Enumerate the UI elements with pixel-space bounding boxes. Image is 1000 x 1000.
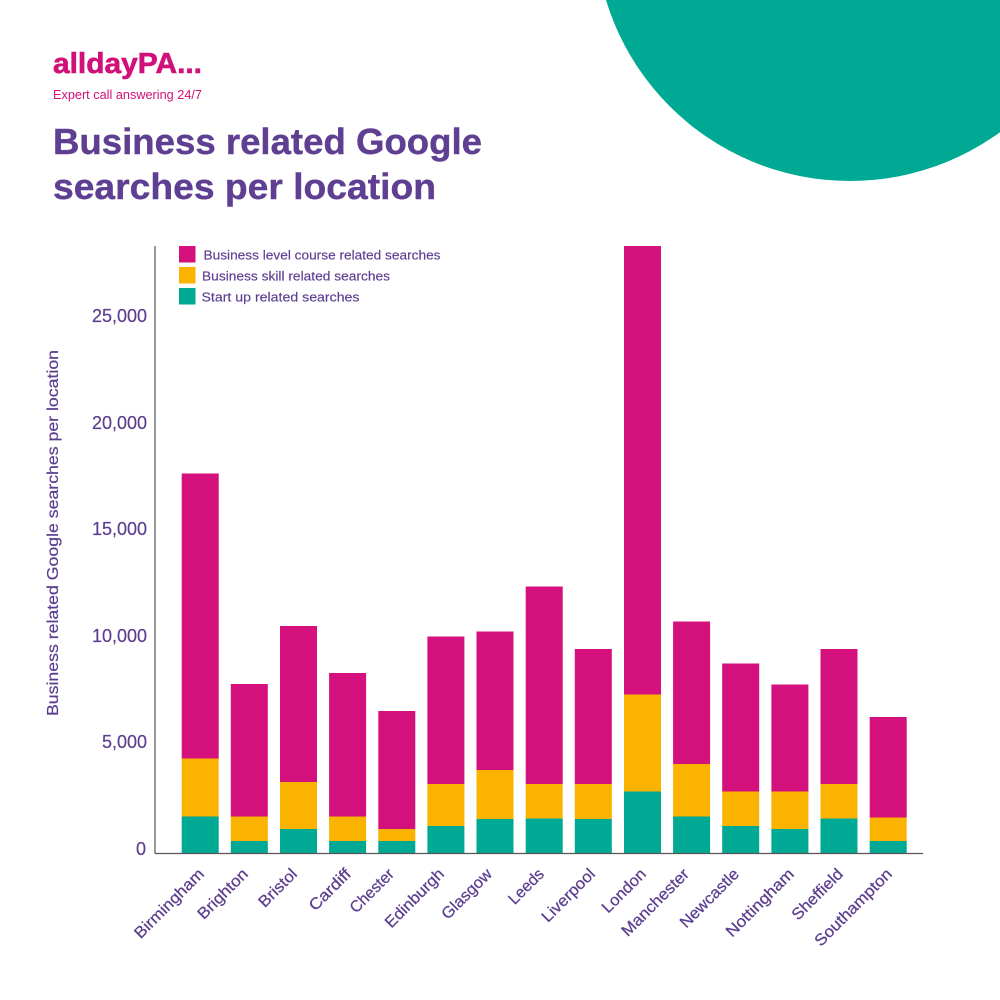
legend item: business skill: Business skill related searches (202, 268, 391, 284)
bar: Nottingham (771, 684, 808, 854)
title: searches per location (53, 166, 436, 207)
y axis tick labels: 15,000 (92, 519, 147, 539)
bar: London (624, 246, 661, 854)
legend (179, 246, 441, 304)
x axis city labels: Chester (347, 865, 398, 917)
x axis city labels: London (599, 866, 650, 917)
bar: Birmingham (182, 474, 219, 854)
legend item: business level course: Business level course related searches (204, 248, 441, 262)
y axis tick labels: 25,000 (92, 306, 147, 326)
x axis city labels: Manchester (619, 865, 693, 940)
y axis tick labels: 10,000 (92, 626, 147, 646)
y axis title: Business related Google searches per location (45, 350, 62, 716)
y axis tick labels: 20,000 (92, 413, 147, 433)
x axis city labels: Sheffield (789, 866, 847, 924)
bar: Cardiff (329, 673, 366, 854)
bar: Leeds (526, 586, 563, 854)
x axis city labels: Newcastle (677, 866, 743, 932)
logo: Expert call answering 24/7 (53, 87, 202, 102)
bar: Sheffield (820, 649, 858, 854)
logo (53, 48, 202, 102)
bar: Chester (378, 711, 415, 854)
bar: Brighton (231, 684, 268, 854)
x axis city labels: Glasgow (439, 865, 496, 923)
y axis tick labels: 0 (136, 839, 146, 859)
y axis tick labels: 5,000 (102, 732, 147, 752)
chart axes (155, 246, 923, 854)
title: Business related Google (53, 121, 482, 162)
x axis city labels: Bristol (256, 866, 301, 911)
logo: alldayPA... (53, 48, 202, 80)
decorative teal circle (595, 0, 1000, 181)
stacked bar chart (182, 246, 907, 854)
x axis city labels: Birmingham (131, 866, 208, 942)
bar: Newcastle (722, 664, 759, 854)
bar: Manchester (673, 622, 710, 854)
y axis tick labels (92, 306, 147, 859)
title (53, 121, 482, 207)
x axis city labels: Nottingham (723, 866, 798, 941)
bar: Bristol (280, 626, 317, 854)
bar: Glasgow (476, 632, 514, 854)
x axis city labels: Southampton (812, 866, 896, 950)
x axis city labels: Brighton (195, 866, 252, 923)
x axis city labels: Leeds (505, 866, 548, 908)
x axis city labels: Liverpool (539, 866, 599, 926)
x axis city labels: Cardiff (306, 865, 355, 915)
bar: Edinburgh (427, 636, 464, 854)
x axis city labels: Edinburgh (382, 866, 448, 932)
legend item: start up: Start up related searches (202, 290, 360, 304)
bar: Liverpool (575, 649, 612, 854)
bar: Southampton (870, 717, 907, 854)
x axis city labels (131, 865, 896, 950)
